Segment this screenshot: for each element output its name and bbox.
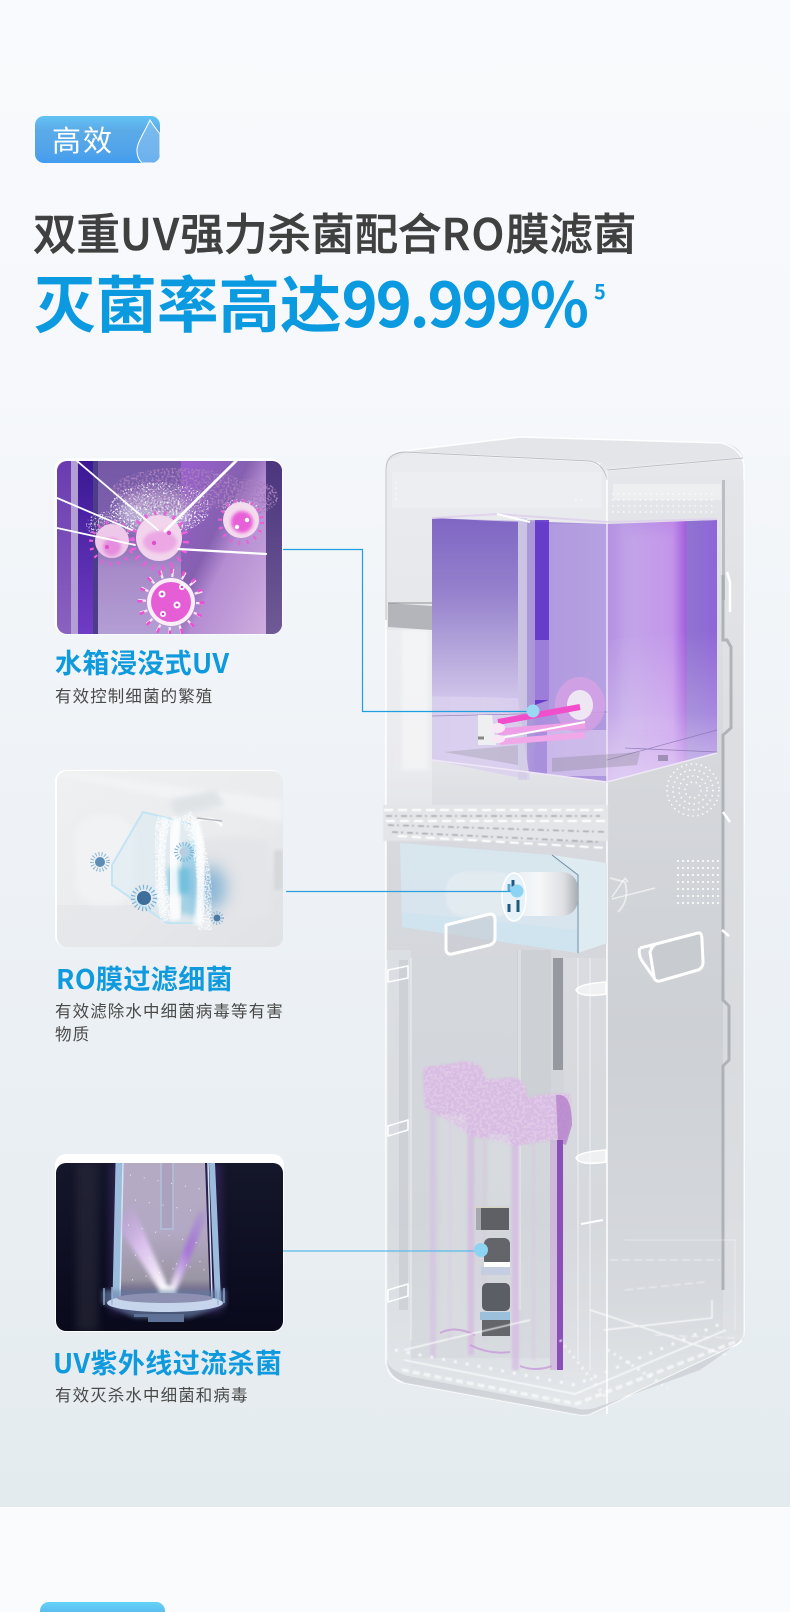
membrane scene [57, 771, 283, 947]
callout dot 1 [526, 704, 540, 718]
tank left face [432, 518, 607, 782]
top lid [386, 437, 743, 466]
label: tank UV heading: 水箱浸没式UV [55, 642, 230, 681]
dissolving virus centre [132, 514, 186, 568]
connector line 1 [283, 548, 540, 718]
UV lamp [478, 677, 605, 745]
water sparkles [128, 1175, 205, 1280]
virus scene [57, 461, 282, 634]
connector line 2 [286, 884, 524, 898]
tank centre column [518, 518, 527, 780]
UV beams [57, 461, 266, 554]
inner rod [161, 1163, 173, 1229]
virus: left [92, 854, 108, 870]
intact virus [140, 571, 202, 633]
filter cartridges [423, 1062, 572, 1370]
heading line 2: 灭菌率高达99.999% [34, 256, 587, 345]
bottom shell [387, 1346, 734, 1415]
upper joint band [383, 805, 608, 848]
machine body [386, 437, 744, 1415]
shelf [388, 603, 432, 630]
tank top rim [432, 514, 717, 522]
dissolving virus left [91, 522, 133, 564]
next section badge [40, 1602, 165, 1612]
panel: flow-through UV image [55, 1154, 284, 1332]
callout dot 2 [510, 884, 524, 898]
top dot grid [396, 480, 716, 512]
RO membrane compartment [400, 843, 607, 953]
callout dot 3 [474, 1243, 488, 1257]
upper front highlight [392, 472, 602, 508]
vent: round speaker [667, 764, 719, 816]
label: RO heading: RO膜过滤细菌 [56, 958, 233, 997]
image frame [54, 458, 282, 634]
tank right face [607, 520, 717, 782]
right strip [723, 480, 744, 1340]
UV rays [119, 1211, 170, 1293]
icon: water drop [136, 119, 160, 163]
image frame [55, 770, 283, 947]
label: flow UV description: 有效灭杀水中细菌和病毒 [55, 1382, 249, 1406]
blue shadow [194, 866, 226, 910]
front panel [386, 453, 607, 1415]
panel: tank immersion UV image [54, 458, 282, 634]
vent: dot grid [677, 861, 720, 903]
heading line 1: 双重UV强力杀菌配合RO膜滤菌 [33, 200, 636, 263]
cartridge speckle [423, 1062, 570, 1146]
water mesh outline [112, 812, 196, 923]
label: RO description [55, 998, 284, 1045]
footnote marker 5: 5 [594, 276, 606, 305]
lamp base [102, 1287, 226, 1322]
label: RO description: 物质 [55, 1021, 90, 1045]
virus: small [212, 912, 222, 924]
label: flow UV heading: UV紫外线过流杀菌 [53, 1342, 282, 1381]
dissolving debris [86, 468, 278, 539]
right side panel [590, 452, 744, 1414]
virus: large [133, 887, 155, 909]
image frame [55, 1154, 284, 1332]
badge: 高效 [35, 116, 160, 163]
virus: on filter [176, 844, 192, 860]
tank dark bottom pieces [444, 745, 518, 765]
foam filter rings [160, 818, 166, 915]
badge label: 高效 [52, 118, 114, 160]
RO cartridge [446, 872, 578, 921]
base details [395, 1240, 735, 1404]
connector line 3 [283, 1243, 488, 1257]
filter stack [475, 1207, 510, 1336]
handles [388, 878, 703, 1302]
lower front columns [386, 470, 607, 1414]
panel: RO membrane image [55, 770, 283, 947]
label: RO description: 有效滤除水中细菌病毒等有害 [55, 998, 284, 1022]
dissolving virus right [220, 501, 262, 543]
label: tank UV description: 有效控制细菌的繁殖 [55, 683, 213, 707]
quartz tube walls [116, 1163, 119, 1300]
lamp scene [56, 1163, 283, 1331]
machine illustration [383, 436, 745, 1416]
purple water tank [432, 514, 717, 782]
